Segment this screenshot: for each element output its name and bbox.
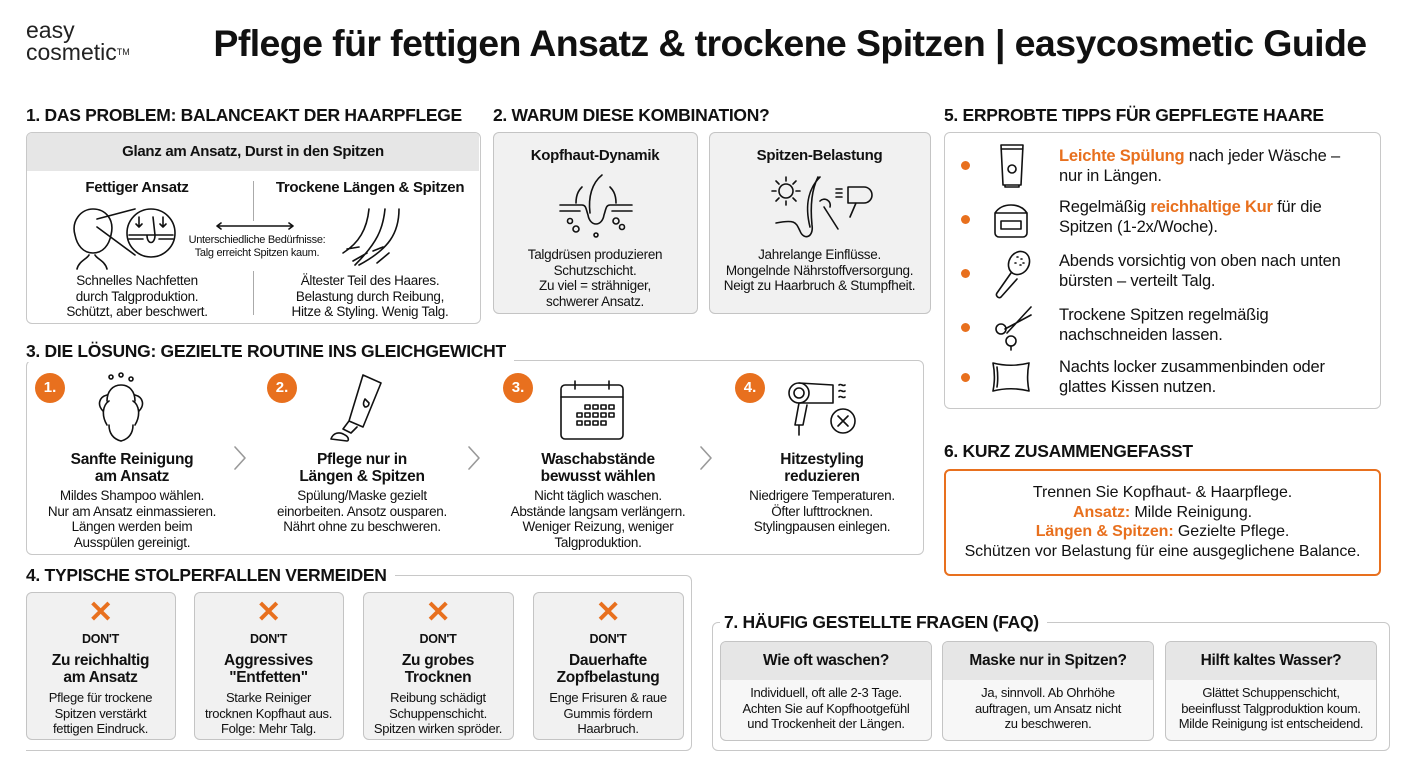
panel: pitfalls (26, 575, 692, 751)
step 3 (503, 373, 685, 550)
tip 1: nur in Längen. (1059, 167, 1162, 185)
step 3: Weniger Reizung, weniger (523, 519, 673, 534)
section 1 heading: 1. DAS PROBLEM: BALANCEAKT DER HAARPFLEGE (26, 105, 462, 125)
logo: easy (26, 17, 75, 43)
tip 2: Regelmäßig reichhaltige Kur für die (1059, 198, 1322, 216)
card 3: Schuppenschicht. (389, 706, 487, 720)
card 2: Folge: Mehr Talg. (221, 721, 316, 736)
card 3: Zu grobes (402, 652, 474, 669)
text oily: Schützt, aber beschwert. (66, 304, 208, 319)
step 3: Abstände langsam verlängern. (511, 504, 685, 518)
callout text: Unterschiedliche Bedürfnisse: (189, 234, 325, 246)
section 5 heading: 5. ERPROBTE TIPPS FÜR GEPFLEGTE HAARE (944, 105, 1324, 125)
step 3: bewusst wählen (541, 468, 655, 485)
step 2: Spülung/Maske gezielt (297, 488, 427, 503)
card 4: Zopfbelastung (557, 669, 659, 686)
panel: problem (26, 132, 481, 324)
card 1: fettigen Eindruck. (53, 721, 148, 736)
arrow 2 (468, 446, 480, 470)
step 1: Sanfte Reinigung (71, 451, 193, 468)
step 4: 4. (744, 379, 756, 396)
faq 2: Ja, sinnvoll. Ab Ohrhöhe (981, 685, 1115, 700)
callout text: Talg erreicht Spitzen kaum. (195, 247, 319, 259)
step 1: Ausspülen gereinigt. (74, 534, 190, 550)
summary box: Ansatz: Milde Reinigung. (1073, 504, 1252, 520)
card 3: ✕ (426, 596, 450, 629)
title: Pflege für fettigen Ansatz & trockene Spitzen | easycosmetic Guide (213, 22, 1367, 64)
text: Schutzschicht. (554, 262, 636, 278)
tip 1 (961, 144, 1340, 188)
pitfall cards (26, 592, 684, 740)
step 2: Längen & Spitzen (299, 468, 425, 485)
section 4 heading: 4. TYPISCHE STOLPERFALLEN VERMEIDEN (26, 565, 387, 585)
step 2 (267, 373, 447, 534)
text oily (66, 273, 208, 319)
card 2 (194, 592, 344, 740)
faq 2: Maske nur in Spitzen? (969, 652, 1127, 669)
text (528, 247, 662, 308)
text (724, 247, 915, 293)
tip 5: Nachts locker zusammenbinden oder (1059, 358, 1325, 376)
card 4: Enge Frisuren & raue (549, 690, 667, 705)
step 1: Längen werden beim (72, 519, 192, 534)
section 3 heading: 3. DIE LÖSUNG: GEZIELTE ROUTINE INS GLEICHGEWICHT (26, 341, 506, 361)
step 1: Mildes Shampoo wählen. (60, 488, 204, 503)
card 4: Haarbruch. (577, 721, 639, 736)
text: Jahrelange Einflüsse. (758, 247, 881, 262)
card 3: DON'T (420, 632, 456, 646)
faq 2: auftragen, um Ansatz nicht (975, 700, 1121, 716)
faq 1: Wie oft waschen? (763, 652, 889, 669)
step 2: Pflege nur in (317, 451, 407, 468)
text dry: Belastung durch Reibung, (296, 288, 444, 304)
card 4: DON'T (590, 632, 626, 646)
card 2: ✕ (256, 596, 281, 629)
subheading oily: Fettiger Ansatz (85, 179, 189, 196)
card 2: trocknen Kopfhaut aus. (205, 706, 332, 720)
summary box: Trennen Sie Kopfhaut- & Haarpflege. (1033, 484, 1292, 501)
card 2: DON'T (250, 632, 287, 646)
card: Spitzen-Belastung (709, 132, 931, 314)
step 1 (35, 372, 216, 550)
step 3: Talgproduktion. (554, 534, 642, 550)
logo (26, 17, 130, 65)
step 3: 3. (512, 379, 524, 396)
card 2: "Entfetten" (229, 669, 308, 686)
step 2: 2. (276, 379, 288, 396)
tip 4: Trockene Spitzen regelmäßig (1059, 306, 1269, 324)
text: schwerer Ansatz. (546, 294, 644, 308)
tip 2 (961, 198, 1322, 238)
faq 1: und Trockenheit der Längen. (747, 716, 905, 731)
panel: tips (944, 132, 1381, 409)
card 1: Pflege für trockene (49, 690, 152, 705)
card 1: am Ansatz (63, 669, 138, 686)
subheading dry: Trockene Längen & Spitzen (276, 179, 464, 196)
card 4: ✕ (596, 596, 620, 629)
step 1: Nur am Ansatz einmassieren. (48, 504, 216, 518)
tip 3 (961, 250, 1341, 298)
faq 3: beeinflusst Talgproduktion koum. (1181, 700, 1361, 716)
arrow: double (216, 222, 294, 230)
card 1 (26, 592, 176, 740)
faq 3: Hilft kaltes Wasser? (1201, 652, 1341, 669)
faq cards (720, 641, 1377, 741)
logo: cosmeticTM (26, 39, 130, 65)
text: Talgdrüsen produzieren (528, 247, 662, 262)
card 1: Spitzen verstärkt (55, 706, 146, 720)
tip 4: nachschneiden lassen. (1059, 326, 1223, 344)
card 4: Gummis fördern (564, 706, 652, 720)
arrow 3 (700, 446, 712, 470)
tip 2: Spitzen (1-2x/Woche). (1059, 218, 1218, 236)
icon: follicle (559, 174, 633, 238)
icon: sun hair dryer brush (771, 176, 873, 238)
text: Neigt zu Haarbruch & Stumpfheit. (724, 278, 915, 293)
callout text (189, 234, 325, 259)
faq 1: Achten Sie auf Kopfhootgefühl (743, 700, 909, 716)
step 3: Nicht täglich waschen. (534, 488, 662, 503)
faq 1: Individuell, oft alle 2-3 Tage. (750, 685, 902, 700)
step 1: am Ansatz (95, 468, 169, 485)
text oily: Schnelles Nachfetten (76, 273, 198, 288)
faq 3: Milde Reinigung ist entscheidend. (1179, 716, 1363, 731)
card 2: Starke Reiniger (226, 690, 311, 705)
faq 2 (942, 641, 1154, 741)
step 4: reduzieren (784, 468, 860, 485)
text dry: Ältester Teil des Haares. (301, 273, 439, 288)
step 2: einorbeiten. Ansotz ousparen. (277, 504, 447, 518)
tip 3: Abends vorsichtig von oben nach unten (1059, 252, 1341, 270)
text dry: Hitze & Styling. Wenig Talg. (292, 304, 448, 319)
summary box (944, 469, 1381, 576)
section 2 heading: 2. WARUM DIESE KOMBINATION? (493, 105, 769, 125)
faq 3: Glättet Schuppenschicht, (1202, 685, 1340, 700)
faq 3 (1165, 641, 1377, 741)
step 3: Waschabstände (541, 451, 655, 468)
text oily: durch Talgproduktion. (76, 288, 198, 304)
step 4: Öfter lufttrocknen. (771, 504, 873, 518)
step 4: Stylingpausen einlegen. (754, 519, 890, 534)
text: Zu viel = strähniger, (539, 278, 651, 293)
faq 2: zu beschweren. (1005, 716, 1091, 731)
panel: solution (26, 360, 924, 555)
summary box: Schützen vor Belastung für eine ausgeglichene Balance. (965, 542, 1360, 560)
tip 4 (961, 306, 1269, 351)
panel header (27, 133, 479, 171)
icon: dry ends (342, 208, 400, 266)
tip 5: glattes Kissen nutzen. (1059, 378, 1216, 396)
card 1: ✕ (88, 596, 113, 629)
arrow 1 (234, 446, 246, 470)
section 6 heading: 6. KURZ ZUSAMMENGEFASST (944, 441, 1193, 461)
step 4: Hitzestyling (780, 451, 864, 468)
step 4: Niedrigere Temperaturen. (749, 488, 895, 503)
step 4 (735, 373, 895, 534)
panel header: Glanz am Ansatz, Durst in den Spitzen (122, 143, 384, 160)
card 3 (363, 592, 514, 740)
card 1: Zu reichhaltig (52, 652, 149, 669)
panel: FAQ (712, 622, 1390, 751)
card: Kopfhaut-Dynamik (493, 132, 698, 314)
step 2: Nährt ohne zu beschweren. (283, 519, 441, 534)
card: Spitzen-Belastung: Spitzen-Belastung (757, 147, 882, 164)
tip 5 (961, 358, 1325, 396)
faq 1 (720, 641, 932, 741)
card 3: Trocknen (405, 669, 471, 686)
section 7 heading: 7. HÄUFIG GESTELLTE FRAGEN (FAQ) (724, 612, 1039, 632)
icon: head with follicle (73, 208, 176, 270)
text dry (292, 273, 448, 319)
tip 3: bürsten – verteilt Talg. (1059, 272, 1215, 290)
summary box: Längen & Spitzen: Gezielte Pflege. (1036, 523, 1289, 540)
text: Mongelnde Nährstoffversorgung. (726, 262, 913, 278)
card 4: Dauerhafte (569, 652, 647, 669)
card 2: Aggressives (224, 652, 313, 669)
card: Kopfhaut-Dynamik: Kopfhaut-Dynamik (531, 147, 659, 164)
tip 1: Leichte Spülung nach jeder Wäsche – (1059, 147, 1340, 165)
card 3: Reibung schädigt (390, 690, 486, 705)
step 1: 1. (44, 379, 56, 396)
card 4 (533, 592, 684, 740)
card 3: Spitzen wirken spröder. (374, 721, 502, 736)
card 1: DON'T (82, 632, 119, 646)
